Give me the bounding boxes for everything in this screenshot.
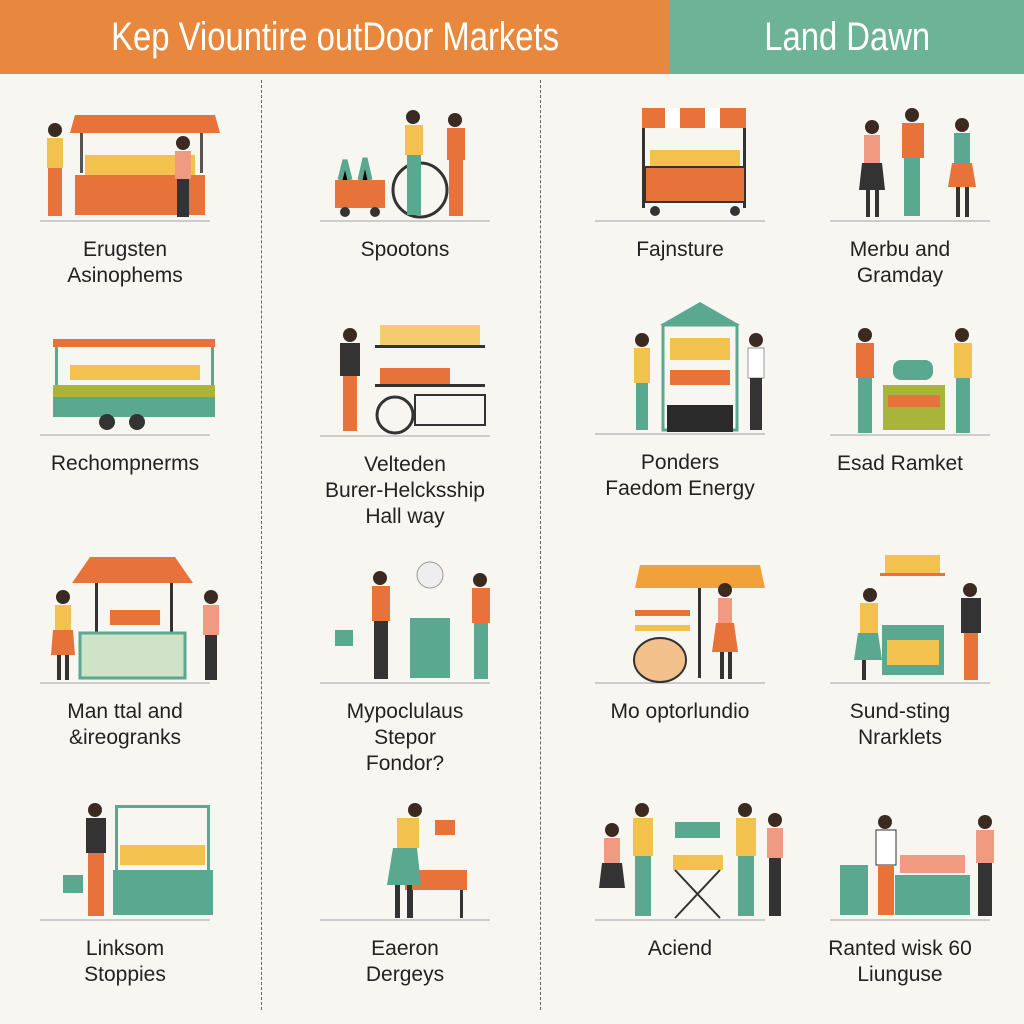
icon: vendor at table <box>320 803 490 921</box>
label: Spootons <box>361 238 449 261</box>
icon: stand with vendors <box>830 555 990 684</box>
label <box>775 936 1024 988</box>
label: Aciend <box>648 937 712 960</box>
icon: vendor and customer at cart <box>790 800 1010 922</box>
label: Fajnsture <box>636 238 724 261</box>
cell r3c3 <box>595 565 765 723</box>
label: Liunguse <box>857 963 943 986</box>
label: Fondor? <box>366 752 444 775</box>
cell r1c4 <box>830 108 990 287</box>
label <box>84 937 166 986</box>
icon: people at stand <box>830 328 990 436</box>
label: Rechompnerms <box>51 452 199 475</box>
icon: three people <box>830 108 990 222</box>
icon: food cart <box>595 108 765 222</box>
label: Gramday <box>857 264 943 287</box>
label <box>366 937 444 986</box>
header: right title bar: Land Dawn <box>764 15 930 59</box>
label: Mypoclulaus <box>347 700 463 723</box>
header: left title bar <box>0 0 670 74</box>
cell r2c1 <box>40 339 215 475</box>
cell r1c3 <box>595 108 765 261</box>
cell r2c3 <box>595 302 765 500</box>
label <box>850 700 950 749</box>
cell r4c4 <box>828 815 994 986</box>
label: Hall way <box>365 505 445 528</box>
cell r3c4 <box>830 555 990 749</box>
label <box>347 700 463 775</box>
label: Sund-sting <box>850 700 950 723</box>
cell r4c1 <box>40 803 213 986</box>
cell r1c1 <box>40 115 220 287</box>
label: Velteden <box>364 453 446 476</box>
label: Esad Ramket <box>837 452 963 475</box>
icon: kiosk with two people <box>595 302 765 435</box>
label: Merbu and <box>850 238 950 261</box>
label: Ponders <box>641 451 719 474</box>
icon: market trailer <box>40 339 215 436</box>
label: Man ttal and <box>67 700 183 723</box>
cell r2c2 <box>320 325 490 528</box>
label: Mo optorlundio <box>611 700 749 723</box>
cell r3c1 <box>40 557 219 749</box>
label: Dergeys <box>366 963 444 986</box>
cell r2c4 <box>830 328 990 475</box>
cell r3c2 <box>320 562 490 775</box>
icon: shop shelf and customer <box>40 803 213 921</box>
icon: folding stand and people <box>595 803 783 921</box>
icon: shelf cart with vendor <box>320 325 490 437</box>
label: Eaeron <box>371 937 439 960</box>
label: Burer-Helcksship <box>325 479 485 502</box>
label <box>850 238 950 287</box>
label: Stepor <box>374 726 436 749</box>
icon: umbrella stall <box>595 565 765 684</box>
label: Faedom Energy <box>605 477 755 500</box>
label <box>67 238 183 287</box>
label <box>67 700 183 749</box>
header: right title bar <box>670 0 1024 74</box>
label: &ireogranks <box>69 726 181 749</box>
icon: vendor booth and shoppers <box>320 562 490 684</box>
label <box>605 451 755 500</box>
label: Erugsten <box>83 238 167 261</box>
icon: cart and people <box>320 110 490 222</box>
label <box>325 453 485 528</box>
label: Ranted wisk 60 <box>828 937 972 960</box>
label: Linksom <box>86 937 164 960</box>
label: Asinophems <box>67 264 183 287</box>
label: Stoppies <box>84 963 166 986</box>
cell r4c2 <box>320 803 490 986</box>
cell r1c2 <box>320 110 490 261</box>
cell r4c3 <box>595 803 783 960</box>
label: Nrarklets <box>858 726 942 749</box>
header: left title bar: Kep Viountire outDoor Markets <box>111 15 559 59</box>
icon: awning stall <box>40 557 219 684</box>
icon: stall with vendors <box>40 115 220 222</box>
